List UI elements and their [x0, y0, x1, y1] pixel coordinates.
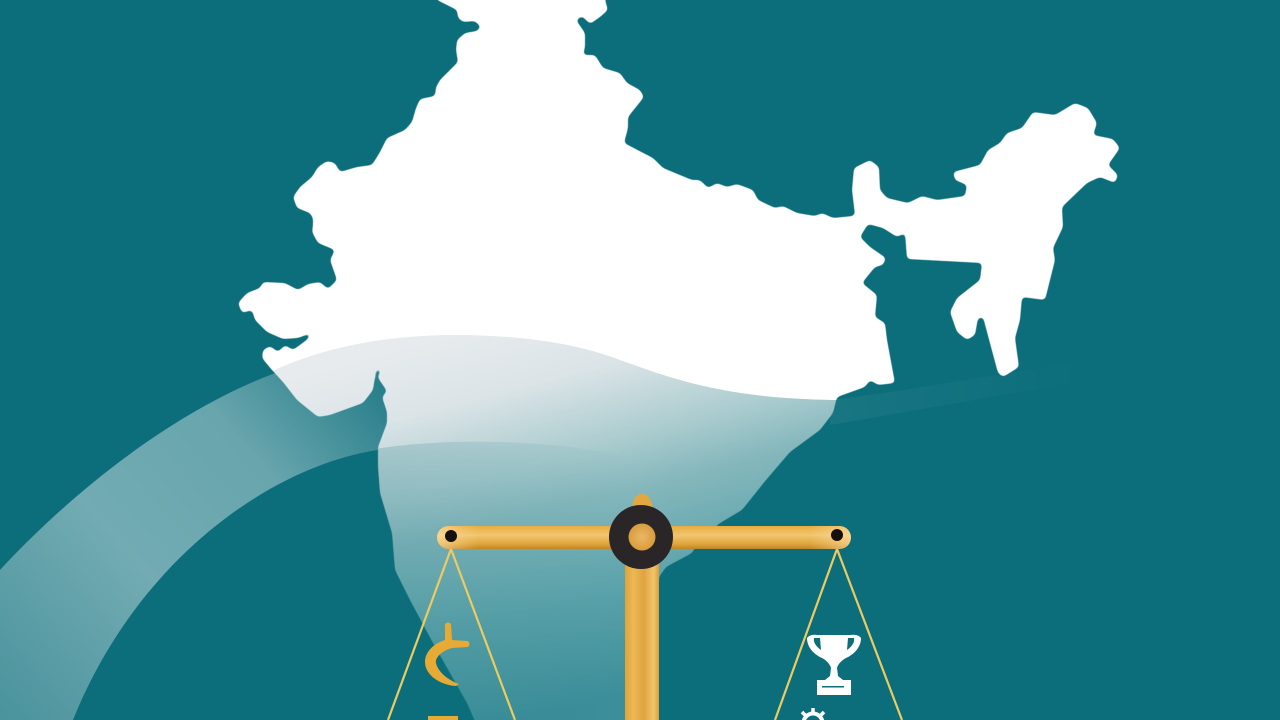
beam: [437, 526, 851, 549]
balance scale: [388, 494, 902, 720]
rupee icon: [425, 622, 470, 720]
top finial: [632, 494, 653, 508]
peninsula shading: [273, 335, 836, 720]
gear icon: [798, 708, 828, 720]
left pin: [445, 530, 457, 542]
white upper country: [238, 0, 1120, 400]
swoosh band east: [830, 362, 1090, 425]
swoosh band west: [0, 330, 400, 720]
map of India: [230, 0, 1130, 720]
left pan strings: [388, 549, 515, 720]
pivot hub: [609, 505, 673, 569]
lower arc shading: [378, 442, 574, 698]
right pin: [831, 529, 843, 541]
post: [625, 560, 659, 720]
trophy icon: [807, 635, 861, 695]
right pan strings: [775, 549, 902, 720]
